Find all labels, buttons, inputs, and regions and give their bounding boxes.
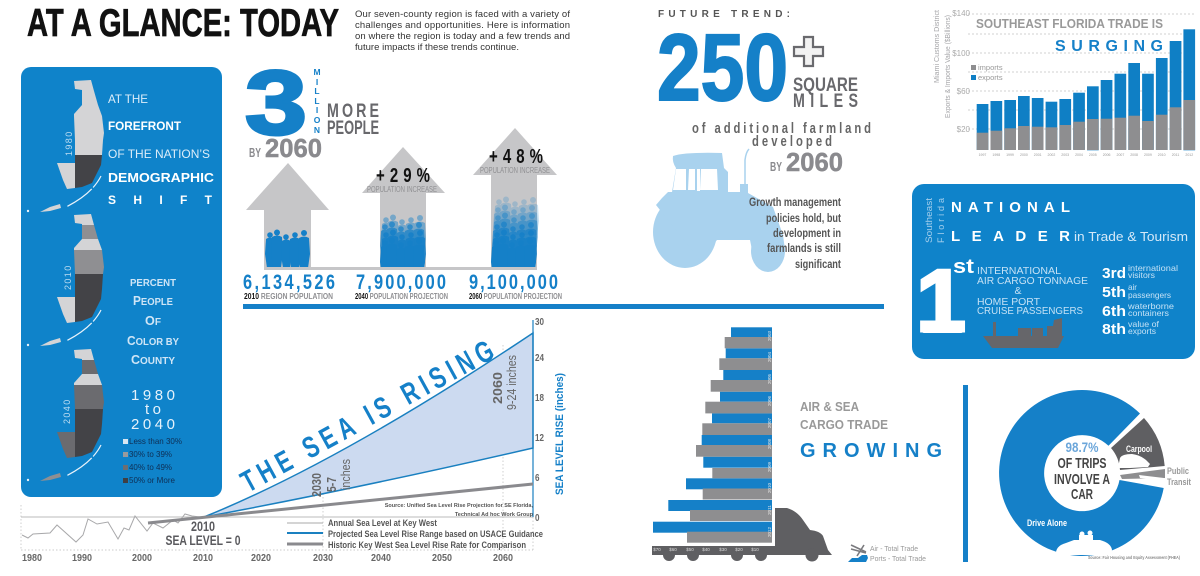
chart: air and sea cargo bars [653, 327, 772, 552]
value labels: $60 [669, 547, 677, 552]
annotation: 2060: 2060 [490, 372, 505, 404]
panel heading: NATIONAL [951, 199, 1070, 216]
year labels: 2011 [767, 505, 772, 515]
population captions: 2040 POPULATION PROJECTION [355, 292, 448, 301]
trade axis values: $20 [957, 125, 971, 134]
panel text: 1980 to 2040 [131, 387, 175, 433]
icon: cargo ship [983, 318, 1064, 348]
icon: plane [851, 545, 866, 556]
year labels: 2009 [767, 461, 772, 472]
trade legend [971, 63, 1003, 82]
value labels [653, 547, 759, 552]
chart source: Source: Unified Sea Level Rise Projection for SE Florida, [385, 503, 533, 509]
historic annual sea level line [22, 514, 200, 542]
trade axis title: Exports & Imports Value ($Billions) [943, 15, 952, 118]
bars: air [687, 337, 772, 543]
trade year labels: 2006 [1103, 153, 1111, 157]
historic rate trend line [148, 484, 533, 523]
heading: the sea is rising: THE SEA IS RISING [235, 333, 500, 499]
heading: air and sea cargo trade growing: AIR & SEA [800, 400, 859, 414]
rankings list: air [1128, 282, 1137, 292]
arrow: 2060 population: +48% [489, 145, 543, 168]
value labels: $30 [719, 547, 727, 552]
value labels: $50 [686, 547, 694, 552]
trade legend: imports [978, 63, 1003, 72]
y axis values: 30 [535, 317, 544, 328]
annotation: 2030: inches [338, 459, 353, 490]
rankings list [1102, 263, 1178, 338]
car icon: carpool [1118, 454, 1150, 468]
panel: demographic shift [21, 67, 222, 497]
heading: 3 million more people by 2060: N [314, 125, 320, 135]
trade year labels: 2005 [1089, 153, 1097, 157]
trade year labels: 2009 [1144, 153, 1152, 157]
intro text block: future impacts if these trends continue. [355, 42, 519, 53]
bars: ports [653, 327, 772, 533]
heading: 3 million more people by 2060: I [316, 77, 318, 87]
text: growth management note: development in [773, 228, 841, 240]
x axis years: 2020 [251, 552, 271, 564]
x axis years: 1990 [72, 552, 92, 564]
y axis values: 12 [535, 433, 544, 444]
panel heading: forefront of demographic shift: FOREFRONT [108, 119, 182, 133]
trade year labels: 2010 [1158, 153, 1166, 157]
text: growth management note: policies hold, but [766, 213, 841, 225]
trade year labels: 2011 [1172, 153, 1179, 157]
chart: sea level rise [21, 317, 566, 564]
panel heading: forefront of demographic shift: SHIFT [108, 193, 213, 207]
year labels: 2005 [767, 373, 772, 384]
center stat: INVOLVE A [1054, 471, 1110, 488]
x axis years: 2010 [193, 552, 213, 564]
annotation: 2060 [490, 355, 519, 410]
y axis values: 18 [535, 393, 544, 404]
chart legend [287, 518, 543, 551]
big number: 250+ square miles: MILES [793, 90, 858, 112]
trade legend: exports [978, 73, 1003, 82]
trade year labels: 2001 [1034, 153, 1042, 157]
label: 2010 sea level zero: 2010 [191, 518, 215, 534]
text: additional farmland developed by 2060: BY [770, 159, 782, 174]
y axis values: 24 [535, 353, 544, 364]
text: additional farmland developed by 2060 [692, 119, 871, 177]
heading: 3 million more people by 2060: PEOPLE [327, 118, 379, 139]
trade year labels: 2012 [1185, 153, 1193, 157]
text: first place categories: INTERNATIONAL [977, 265, 1061, 277]
y axis title: SEA LEVEL RISE (inches) [554, 373, 566, 495]
heading: 3 million more people by 2060: L [314, 86, 320, 96]
population captions: 2010 REGION POPULATION [244, 292, 333, 301]
label: 2010 sea level zero [166, 518, 241, 548]
trade year labels: 1998 [992, 153, 1000, 157]
panel heading: forefront of demographic shift [108, 92, 215, 207]
labels: Carpool [1126, 444, 1152, 455]
text: additional farmland developed by 2060: 2060 [786, 147, 843, 177]
panel label: southeast florida [924, 197, 946, 243]
panel text: percent people of color by county: OF [145, 314, 161, 328]
panel text: 1980 to 2040: 1980 [131, 387, 175, 404]
map: 1980 [27, 80, 104, 212]
arrow: 2040 population [362, 147, 445, 276]
big number: 250+ square miles: SQUARE [793, 75, 858, 96]
panel text: percent people of color by county: PERCENT [130, 277, 177, 289]
cargo legend: Air - Total Trade [870, 544, 918, 553]
text: additional farmland developed by 2060: developed [752, 132, 832, 149]
intro text block: challenges and opportunities. Here is information [355, 20, 570, 31]
center stat: CAR [1071, 486, 1093, 503]
rankings list: 6th [1102, 303, 1126, 320]
annotation: 2030: 5-7 [324, 477, 339, 492]
x axis years: 2050 [432, 552, 452, 564]
intro text block: Our seven-county region is faced with a variety of [355, 9, 570, 20]
big rank: 1st: st [953, 256, 974, 278]
year labels: 2006 [767, 395, 772, 406]
rankings list: 8th [1102, 321, 1126, 338]
map: 2010 [27, 214, 104, 346]
panel heading: forefront of demographic shift: OF THE NATION’S [108, 147, 210, 161]
panel text: 1980 to 2040: 2040 [131, 416, 175, 433]
panel heading: in Trade & Tourism [1074, 229, 1188, 244]
heading: future trend: FUTURE TREND: [658, 9, 790, 20]
trade axis values: $60 [957, 87, 971, 96]
labels: Transit [1167, 477, 1192, 488]
text: first place categories [977, 265, 1088, 317]
text: growth management note: Growth management [749, 197, 841, 209]
rankings list: visitors [1128, 270, 1155, 280]
heading: air and sea cargo trade growing: GROWING [800, 440, 942, 462]
trade year labels: 2007 [1117, 153, 1124, 157]
annotation: 2030 [309, 459, 353, 497]
rankings list: passengers [1128, 290, 1171, 300]
center stat [1054, 440, 1110, 503]
trade year labels: 1999 [1006, 153, 1014, 157]
panel: national leader [912, 184, 1195, 359]
rankings list: 3rd [1102, 265, 1126, 282]
arrow: 2040 population: +29% [376, 164, 430, 187]
x axis years: 2060 [493, 552, 513, 564]
panel heading: forefront of demographic shift: DEMOGRAPHIC [108, 170, 215, 185]
labels: Public [1167, 466, 1189, 477]
map: 2040 [27, 349, 104, 481]
heading: air and sea cargo trade growing [800, 400, 942, 462]
map legend: 30% to 39% [129, 449, 172, 459]
big rank: 1st: 1 [916, 251, 966, 350]
panel text: percent people of color by county: COLOR BY [127, 334, 179, 348]
icon: ship [848, 555, 868, 562]
map: 2040: 2040 [62, 398, 72, 424]
map: 1980: 1980 [64, 130, 74, 156]
arrow: 2040 population: POPULATION INCREASE [367, 185, 437, 194]
x axis years [22, 552, 513, 564]
x axis years: 1980 [22, 552, 42, 564]
rankings list: 5th [1102, 284, 1126, 301]
trade year labels: 2002 [1048, 153, 1055, 157]
panel text: percent people of color by county: PEOPLE [133, 294, 173, 308]
chart: trade surging: SURGING [1055, 38, 1163, 55]
map legend: 50% or More [129, 475, 175, 485]
year labels [767, 330, 772, 537]
big number: 250+ square miles: 250 [657, 15, 788, 121]
intro text block [355, 9, 570, 53]
annotation: 2030: 2030 [309, 473, 324, 497]
trade axis title: Miami Customs District [932, 9, 941, 83]
car icon: convertible [1056, 530, 1112, 555]
chart: trips donut [999, 390, 1192, 560]
population figures: 9,100,000 [469, 270, 558, 293]
year labels: 2008 [767, 438, 772, 449]
arrow: 2010 population [246, 163, 329, 268]
heading: 3 million more people by 2060: I [316, 105, 318, 115]
chart: trade surging [932, 9, 1196, 157]
panel text: percent people of color by county: COUNTY [131, 353, 175, 367]
text: first place categories: & [1014, 285, 1022, 297]
donut: drive alone [999, 390, 1164, 556]
panel label: southeast florida: Southeast [924, 197, 934, 243]
chart source: Technical Ad hoc Work Group [455, 512, 534, 518]
sea level range wedge [204, 333, 533, 517]
year labels: 2004 [767, 351, 772, 362]
population figures [243, 270, 558, 293]
icon: truck [652, 508, 832, 562]
year labels: 2003 [767, 330, 772, 341]
heading: air and sea cargo trade growing: CARGO TRADE [800, 418, 888, 432]
y axis values [535, 317, 544, 524]
year labels: 2007 [767, 417, 772, 428]
value labels: $10 [751, 547, 759, 552]
text: first place categories: HOME PORT [977, 296, 1041, 308]
trade year labels: 2008 [1130, 153, 1138, 157]
y axis values: 6 [535, 473, 540, 484]
x axis years: 2000 [132, 552, 152, 564]
panel text: percent people of color by county [127, 277, 179, 367]
text: growth management note [749, 197, 841, 271]
arrow: 2060 population: POPULATION INCREASE [480, 166, 550, 175]
trade axis title [932, 9, 952, 118]
trade axis values: $140 [952, 9, 971, 18]
heading: 3 million more people by 2060: O [314, 115, 321, 125]
bars: imports [977, 100, 1195, 150]
center stat: OF TRIPS [1058, 455, 1106, 472]
heading: 3 million more people by 2060: 2060 [265, 133, 322, 163]
map legend: Less than 30% [129, 436, 182, 446]
trade axis values [952, 9, 971, 134]
population captions [244, 292, 562, 301]
annotation: 2060: 9-24 inches [504, 355, 519, 410]
labels: Drive Alone [1027, 518, 1067, 529]
text: additional farmland developed by 2060: of additional farmland [692, 119, 871, 136]
trade year labels: 2004 [1075, 153, 1083, 157]
label: 2010 sea level zero: SEA LEVEL = 0 [166, 532, 241, 548]
year labels: 2010 [767, 482, 772, 493]
panel heading [951, 199, 1188, 245]
bars: exports [977, 29, 1195, 150]
map legend: 40% to 49% [129, 462, 172, 472]
icon: tractor [653, 149, 785, 272]
year labels: 2012 [767, 526, 772, 537]
rankings list: exports [1128, 326, 1156, 336]
panel label: southeast florida: Florida [936, 198, 946, 243]
trade heading: SOUTHEAST FLORIDA TRADE IS [976, 17, 1163, 31]
panel heading: LEADER [951, 228, 1070, 245]
rankings list: value of [1128, 319, 1160, 329]
heading: 3 million more people by 2060: BY [249, 145, 261, 160]
rankings list: containers [1128, 308, 1169, 318]
labels [1027, 444, 1192, 529]
value labels: $70 [653, 547, 661, 552]
panel heading: forefront of demographic shift: AT THE [108, 92, 148, 106]
y axis values: 0 [535, 513, 540, 524]
chart source [385, 503, 534, 518]
heading: 3 million more people by 2060: L [314, 96, 320, 106]
text: first place categories: CRUISE PASSENGERS [977, 305, 1083, 317]
trade year labels: 1997 [979, 153, 986, 157]
text: first place categories: AIR CARGO TONNAGE [977, 275, 1088, 287]
population figures: 6,134,526 [243, 270, 335, 293]
panel text: 1980 to 2040: to [145, 401, 161, 418]
trade axis values: $100 [952, 49, 971, 58]
heading: 3 million more people by 2060: 3 [245, 53, 307, 154]
cargo legend: Ports - Total Trade [870, 554, 926, 563]
trade year labels [979, 153, 1193, 157]
cargo legend [848, 544, 926, 563]
text: growth management note: significant [795, 259, 841, 271]
population captions: 2060 POPULATION PROJECTION [469, 292, 562, 301]
heading: 3 million more people by 2060: M [313, 67, 321, 77]
intro text block: on where the region is today and a few trends and [355, 31, 570, 42]
x axis years: 2030 [313, 552, 333, 564]
chart legend: Annual Sea Level at Key West [328, 518, 438, 529]
heading: 3 million more people by 2060: MORE [327, 100, 379, 122]
trade year labels: 2003 [1061, 153, 1069, 157]
value labels: $40 [702, 547, 710, 552]
chart legend: Historic Key West Sea Level Rise Rate for Comparison [328, 540, 526, 551]
chart legend: Projected Sea Level Rise Range based on USACE Guidance [328, 529, 543, 540]
map: 2010: 2010 [63, 264, 73, 290]
title: AT A GLANCE: TODAY [27, 2, 339, 45]
map legend [123, 436, 182, 485]
value labels: $20 [735, 547, 743, 552]
heading: 3 million more people by 2060 [245, 53, 379, 163]
rankings list: waterborne [1127, 301, 1174, 311]
chart: population arrows [243, 128, 562, 301]
center stat: 98.7% [1066, 440, 1098, 455]
population figures: 7,900,000 [356, 270, 446, 293]
trade year labels: 2000 [1020, 153, 1028, 157]
donut: public transit [1120, 469, 1165, 480]
x axis years: 2040 [371, 552, 391, 564]
donut: carpool [1111, 418, 1165, 470]
text: growth management note: farmlands is still [767, 243, 841, 255]
rankings list: international [1128, 263, 1178, 273]
arrow: 2060 population [473, 128, 557, 276]
